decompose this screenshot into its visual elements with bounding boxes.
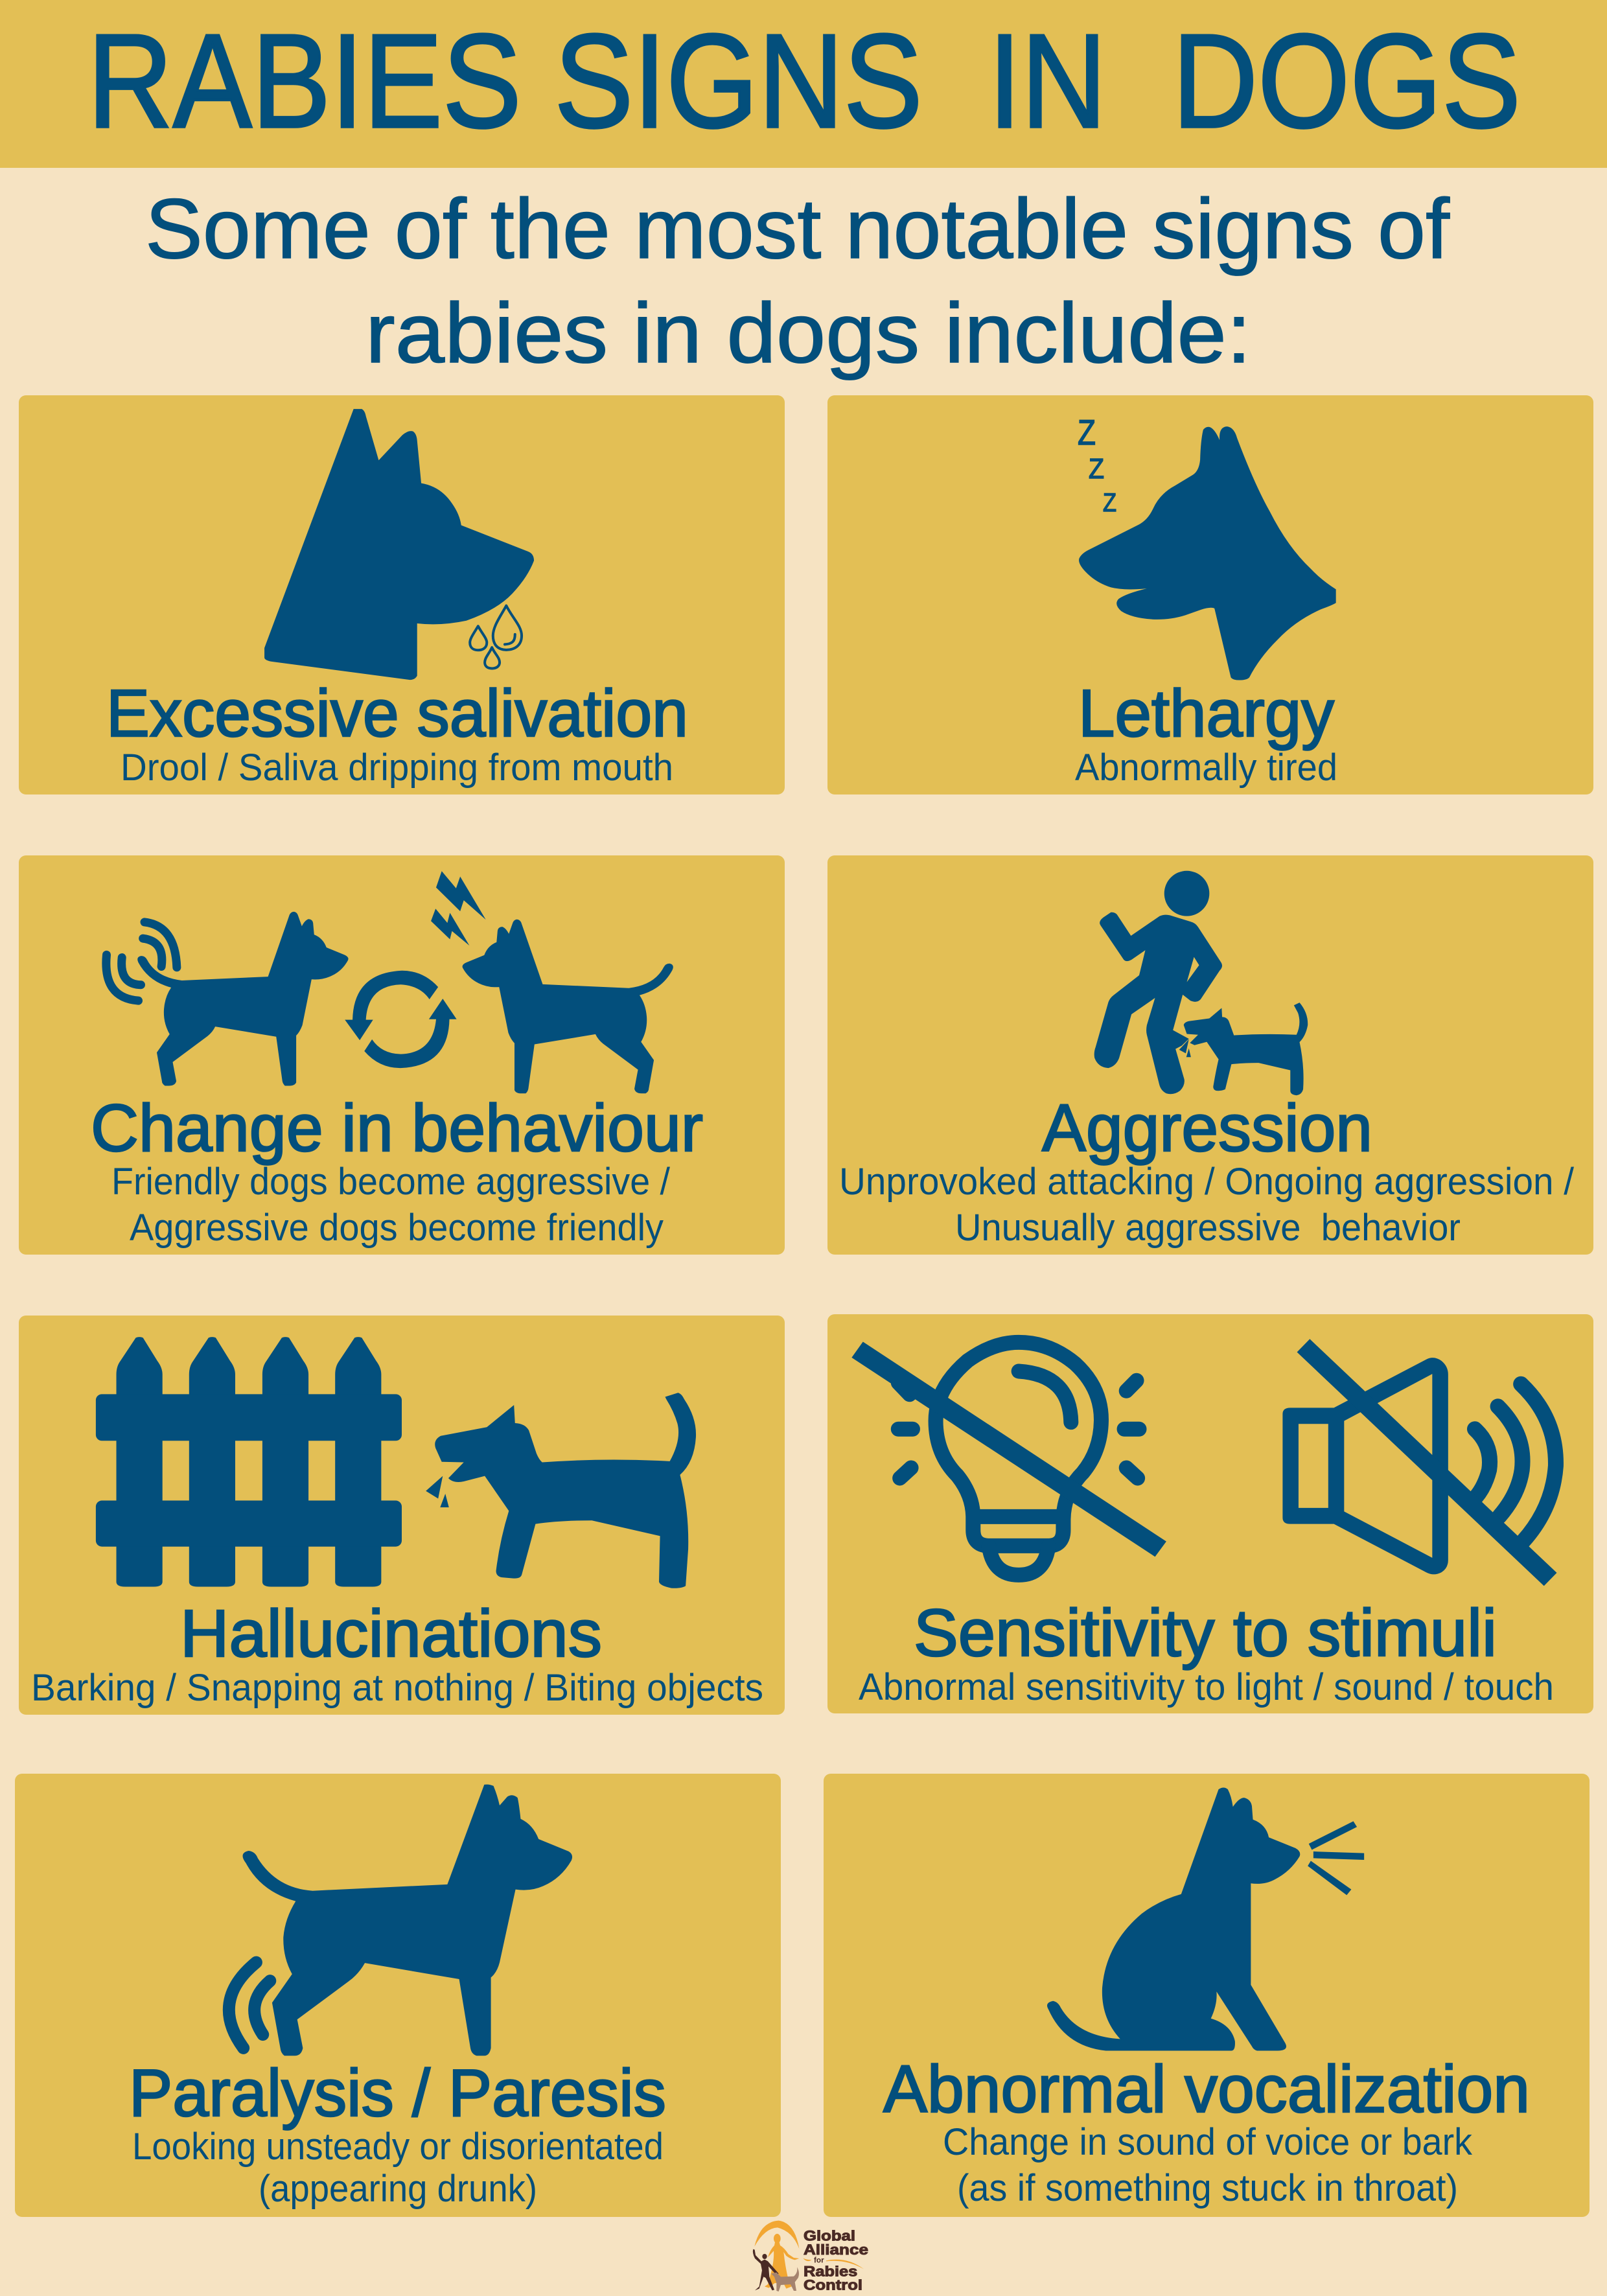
logo text: Rabies bbox=[804, 2264, 857, 2280]
header band with title bbox=[0, 0, 1607, 168]
heading: Change in behaviour bbox=[91, 1091, 703, 1165]
icon: crossed-out light bulb bbox=[851, 1342, 1166, 1575]
panel: excessive salivation bbox=[19, 395, 785, 794]
panel: aggression bbox=[827, 855, 1593, 1255]
description: (appearing drunk) bbox=[259, 2168, 537, 2210]
heading: Paralysis / Paresis bbox=[129, 2056, 666, 2130]
subtitle: rabies in dogs include: bbox=[365, 285, 1251, 380]
description: Unprovoked attacking / Ongoing aggression / bbox=[839, 1161, 1575, 1203]
heading: Aggression bbox=[1042, 1091, 1372, 1165]
description: Friendly dogs become aggressive / bbox=[111, 1161, 671, 1203]
subtitle: Some of the most notable signs of bbox=[145, 181, 1450, 276]
icon: sleep letters: Z bbox=[1078, 412, 1096, 452]
panel: lethargy bbox=[827, 395, 1593, 794]
subtitle bbox=[145, 181, 1450, 380]
icon: sleep letters: Z bbox=[1103, 489, 1116, 517]
panel: abnormal vocalization bbox=[824, 1774, 1590, 2217]
heading: Hallucinations bbox=[180, 1596, 602, 1671]
icon: sleep letters bbox=[1078, 412, 1116, 517]
icon: dog snapping bbox=[426, 1393, 696, 1588]
description: Drool / Saliva dripping from mouth bbox=[121, 747, 673, 789]
icon: friendly and aggressive dogs with cycle arrows bbox=[106, 871, 673, 1093]
panel: change in behaviour bbox=[19, 855, 785, 1255]
heading: Excessive salivation bbox=[106, 676, 688, 750]
icon: fence bbox=[96, 1337, 402, 1586]
icon: dog biting a person bbox=[1094, 871, 1308, 1095]
icon: crossed-out speaker bbox=[1282, 1339, 1557, 1586]
description bbox=[839, 1161, 1575, 1249]
description bbox=[132, 2126, 664, 2210]
description: Looking unsteady or disorientated bbox=[132, 2126, 664, 2168]
icon: sleep letters: Z bbox=[1089, 453, 1104, 485]
description bbox=[111, 1161, 671, 1249]
description bbox=[943, 2121, 1473, 2209]
description: Abnormal sensitivity to light / sound / touch bbox=[859, 1666, 1554, 1708]
description: Aggressive dogs become friendly bbox=[130, 1207, 664, 1249]
logo mark bbox=[753, 2221, 864, 2291]
heading: Sensitivity to stimuli bbox=[914, 1595, 1497, 1670]
icon: sitting dog barking bbox=[1047, 1788, 1364, 2050]
icon: sleeping dog head bbox=[1079, 426, 1336, 680]
logo text: Global bbox=[804, 2227, 855, 2244]
description: (as if something stuck in throat) bbox=[957, 2167, 1458, 2209]
logo text: Alliance bbox=[804, 2242, 868, 2258]
description: Change in sound of voice or bark bbox=[943, 2121, 1473, 2163]
panel: sensitivity to stimuli bbox=[827, 1314, 1593, 1713]
logo text: for bbox=[814, 2256, 824, 2265]
description: Barking / Snapping at nothing / Biting objects bbox=[31, 1667, 763, 1709]
panel: hallucinations bbox=[19, 1316, 785, 1715]
panel: paralysis / paresis bbox=[15, 1774, 781, 2217]
icon: drooling dog head bbox=[264, 409, 534, 680]
logo text bbox=[804, 2227, 868, 2293]
description: Unusually aggressive behavior bbox=[955, 1207, 1461, 1249]
logo: Global Alliance for Rabies Control bbox=[753, 2221, 868, 2293]
icon: dog with trembling hind leg bbox=[229, 1785, 572, 2056]
heading: Lethargy bbox=[1078, 676, 1334, 750]
heading: Abnormal vocalization bbox=[883, 2052, 1530, 2126]
logo text: Control bbox=[804, 2277, 862, 2293]
description: Abnormally tired bbox=[1075, 747, 1337, 789]
